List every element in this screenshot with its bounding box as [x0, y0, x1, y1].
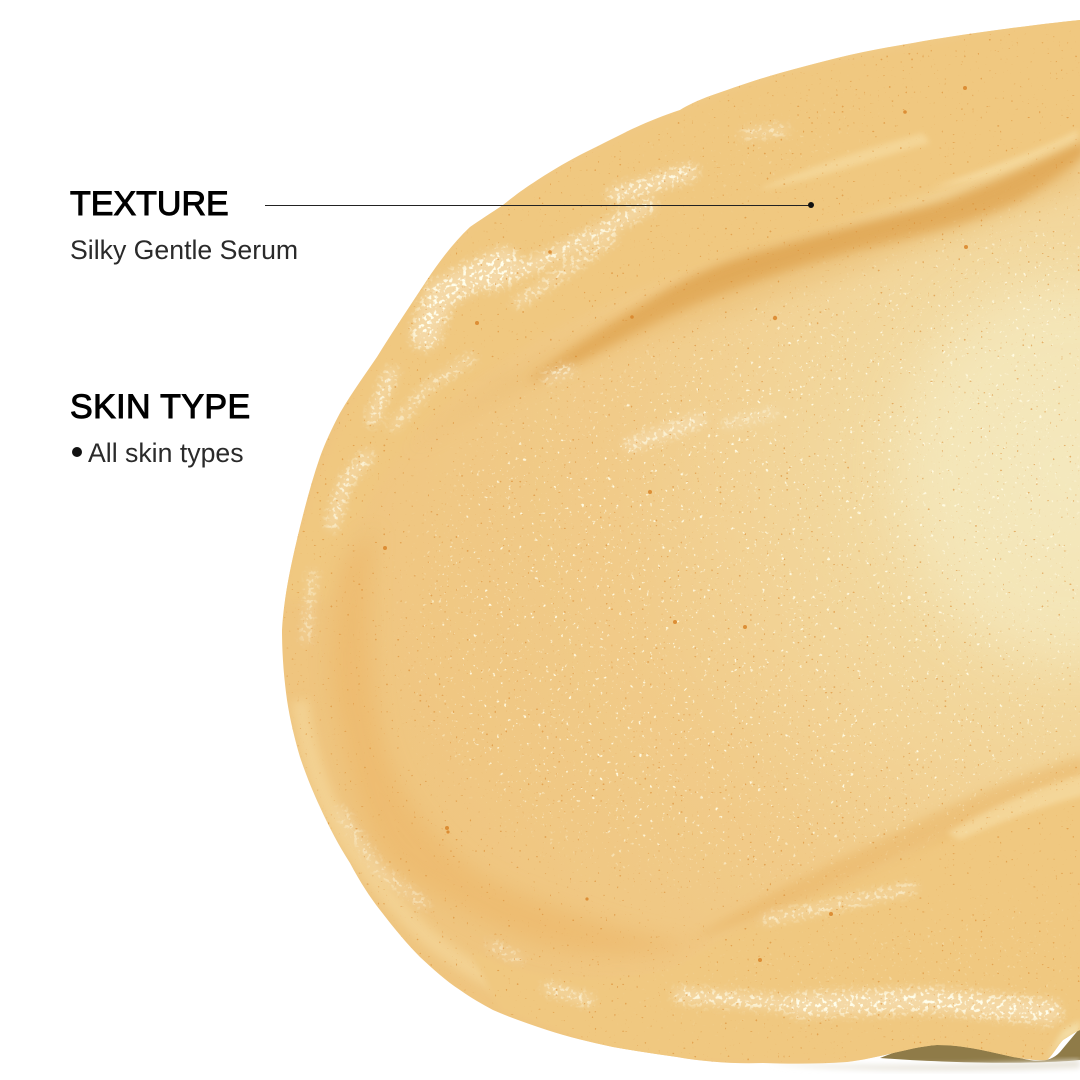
bullet: all skin types: All skin types: [88, 438, 244, 468]
inner rim shadow ring: [332, 548, 666, 955]
outer top ridge: [280, 10, 1080, 600]
heading: texture: TEXTURE: [70, 185, 229, 223]
shade above lower ridge: [690, 755, 1080, 940]
soft highlight glow: [306, 130, 1050, 1012]
crease shadow upper: [527, 140, 1080, 382]
top ridge pale strips: [757, 130, 1078, 190]
heading: skin type: SKIN TYPE: [70, 388, 251, 426]
right end gel tip: [1048, 1020, 1080, 1054]
lower ridge pale strip: [947, 773, 1080, 840]
text: silky gentle serum: Silky Gentle Serum: [70, 235, 298, 265]
pale outer rim: [292, 700, 486, 986]
sparse white glints: [394, 102, 1080, 1028]
pale center glow: [900, 280, 1080, 660]
broad shadow above center: [646, 165, 1080, 336]
contact shadow: [880, 1028, 1080, 1063]
serum body: [270, 0, 1080, 1080]
larger orange speckles: [383, 86, 968, 962]
serum swatch image: [282, 20, 1080, 1073]
dense white glints: [298, 121, 1066, 1029]
lower ridge: [470, 770, 1080, 1060]
orange speckles: [270, 0, 1080, 1080]
faint floor shadow: [770, 1060, 1080, 1071]
